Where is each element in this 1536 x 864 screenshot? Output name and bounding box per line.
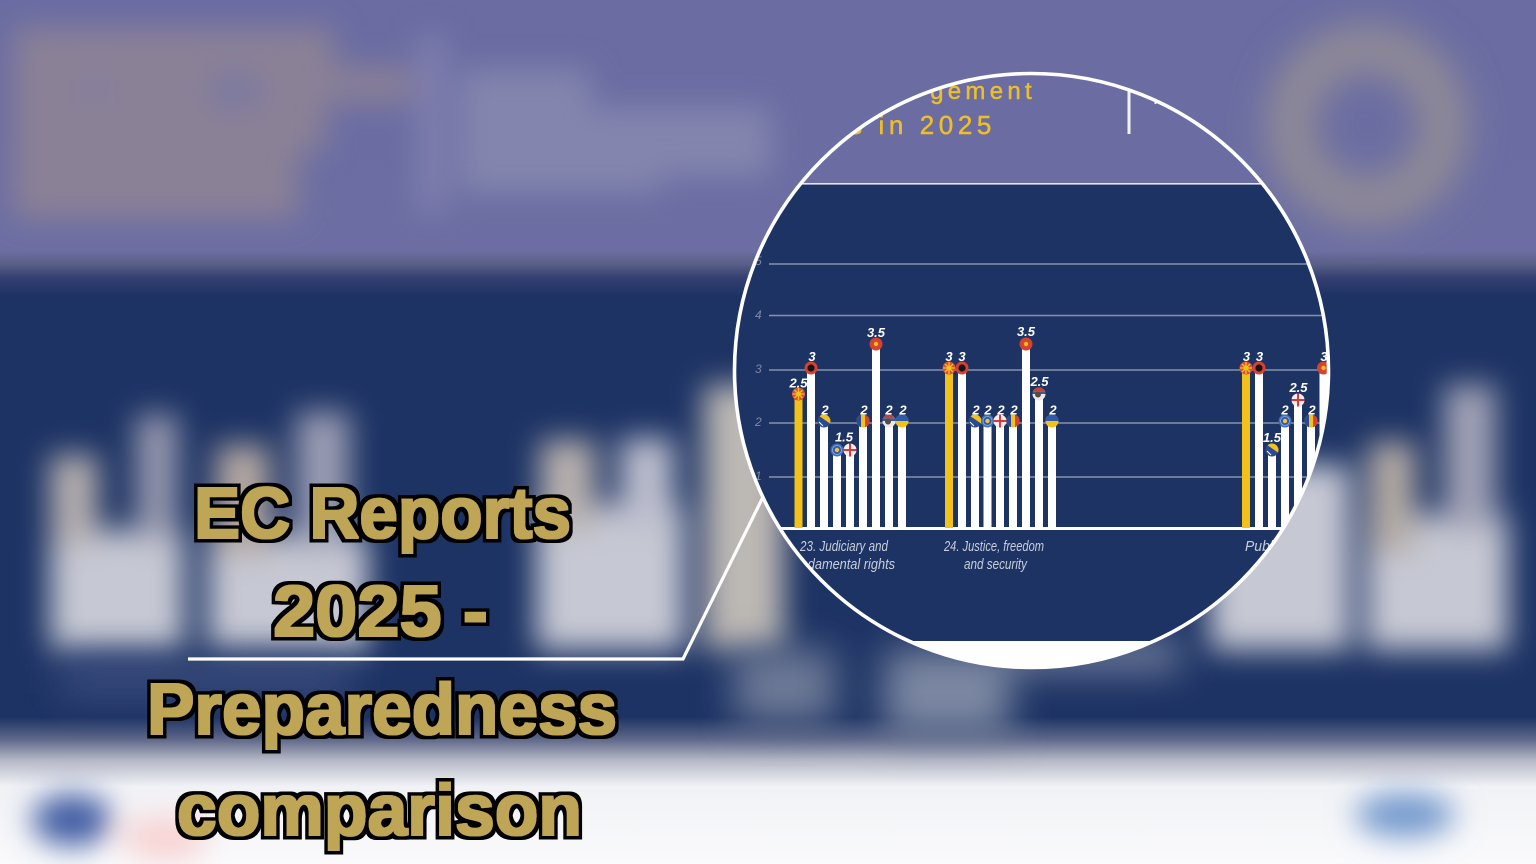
lens ring xyxy=(734,74,1328,668)
bar group: 24. Justice, freedom and security: 3.5 xyxy=(1017,324,1036,339)
chart baseline xyxy=(781,527,1282,530)
lens header area xyxy=(854,83,1156,134)
bar group: 23. Judiciary and fundamental rights: 2 xyxy=(859,402,868,418)
sharp heading fragment: gement xyxy=(930,78,1036,105)
bar group: Public administration: 3 xyxy=(1256,349,1264,364)
bar group: 24. Justice, freedom and security xyxy=(942,324,1058,528)
bar group: 24. Justice, freedom and security: 2 xyxy=(971,402,980,418)
title: EC Reports xyxy=(194,474,571,554)
category labels: Public xyxy=(1245,538,1283,555)
bar group: 24. Justice, freedom and security: 3 xyxy=(945,349,953,364)
bar group: 23. Judiciary and fundamental rights: 1.5 xyxy=(835,430,854,444)
bar group: 23. Judiciary and fundamental rights: 2.5 xyxy=(788,376,808,390)
bar group: 23. Judiciary and fundamental rights: 2 xyxy=(898,402,907,418)
title xyxy=(147,474,617,851)
bar group: 23. Judiciary and fundamental rights: 2 xyxy=(884,402,893,418)
bar group: 23. Judiciary and fundamental rights xyxy=(788,325,908,528)
logo divider xyxy=(1128,88,1130,134)
bar group: 24. Justice, freedom and security: 2.5 xyxy=(1029,374,1049,389)
blurred chart labels xyxy=(60,640,1180,735)
sharp heading fragment xyxy=(854,83,1032,134)
y axis labels: 3 xyxy=(755,362,762,376)
magnifier lens xyxy=(730,70,1340,681)
bar group: 24. Justice, freedom and security: 2 xyxy=(983,402,992,418)
y axis labels xyxy=(755,256,762,480)
bar group: Public administration: 2 xyxy=(1307,402,1316,418)
sharp heading fragment: s in 2025 xyxy=(849,110,996,140)
bar group: 24. Justice, freedom and security: 2 xyxy=(1009,402,1018,418)
bar group: Public administration xyxy=(1240,349,1330,528)
blurred header title and logo xyxy=(14,28,770,218)
category labels: and security xyxy=(964,556,1028,573)
bar group: 23. Judiciary and fundamental rights: 3 xyxy=(808,349,816,364)
bar group: 24. Justice, freedom and security: 2 xyxy=(1048,402,1057,418)
blurred EU ring xyxy=(1290,48,1444,202)
bar group: Public administration: 3 xyxy=(1243,349,1251,364)
title: 2025 - xyxy=(273,572,488,652)
bar group: Public administration: 2.5 xyxy=(1288,380,1308,395)
blurred bars of the chart xyxy=(50,385,1508,650)
bar group: 23. Judiciary and fundamental rights: 3.5 xyxy=(867,325,886,340)
bar group: 23. Judiciary and fundamental rights: 2 xyxy=(820,402,829,418)
callout line xyxy=(188,497,763,659)
category labels: 24. Justice, freedom xyxy=(943,538,1044,555)
y axis labels: 1 xyxy=(755,469,762,483)
y axis labels: 2 xyxy=(754,415,762,429)
bar group: 24. Justice, freedom and security: 3 xyxy=(958,349,966,364)
y axis labels: 5 xyxy=(755,254,762,268)
y axis labels: 4 xyxy=(755,308,762,322)
category labels xyxy=(800,540,1273,572)
title: comparison xyxy=(177,771,582,851)
bar group: Public administration: 3 xyxy=(1320,349,1328,364)
title: Preparedness xyxy=(147,670,617,750)
bar group: Public administration: 1.5 xyxy=(1263,430,1282,445)
chart panel xyxy=(730,183,1340,641)
category labels: fundamental rights xyxy=(790,556,895,573)
category labels: 23. Judiciary and xyxy=(799,538,889,555)
bar group: Public administration: 2 xyxy=(1280,402,1289,418)
blurred footer logos xyxy=(32,793,1455,860)
bar group: 24. Justice, freedom and security: 2 xyxy=(996,402,1005,418)
